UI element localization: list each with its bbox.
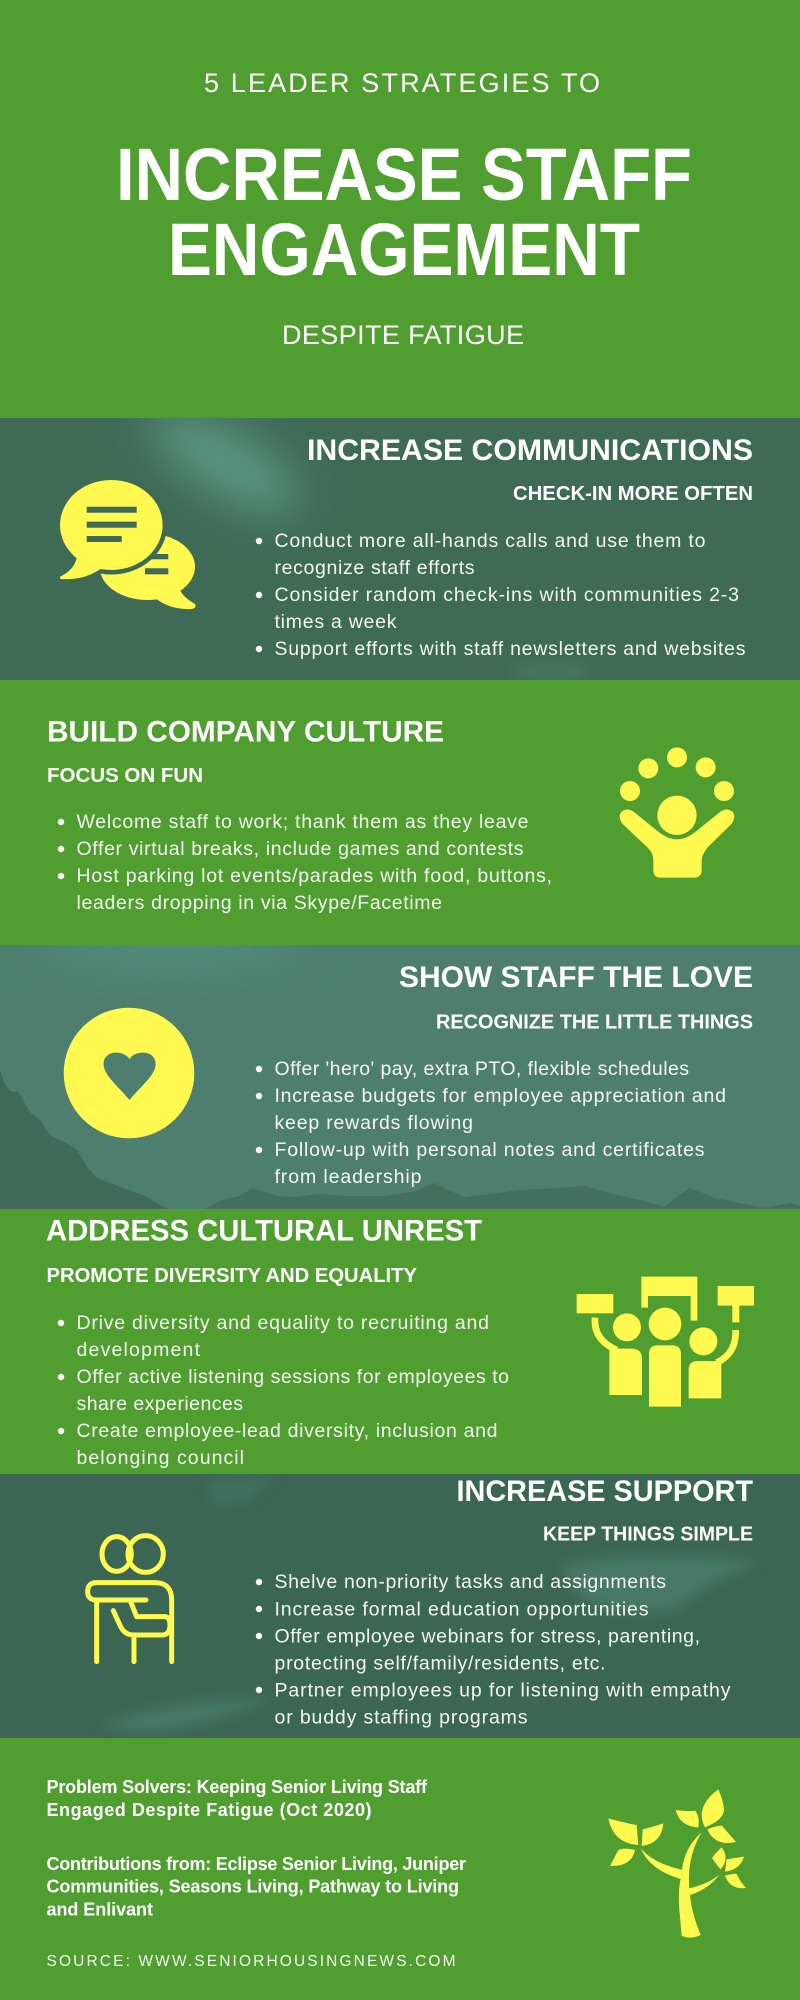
bullet list: development	[76, 1339, 201, 1361]
panel: footer credits	[0, 1738, 800, 2000]
subheading: FOCUS ON FUN	[47, 765, 203, 787]
main title: INCREASE STAFF	[116, 133, 692, 216]
bullet list: Create employee-lead diversity, inclusion and	[76, 1420, 498, 1442]
heading: INCREASE SUPPORT	[456, 1475, 753, 1508]
bullet list: Partner employees up for listening with empathy	[274, 1680, 731, 1702]
bullet list: Shelve non-priority tasks and assignments	[274, 1571, 666, 1593]
webinar reference text	[46, 1777, 428, 1820]
contributions text	[46, 1854, 466, 1920]
bullet list: times a week	[274, 611, 397, 633]
icon: tree with leaves	[608, 1789, 746, 1938]
bullet list: Support efforts with staff newsletters and websites	[274, 638, 746, 660]
bullet list: share experiences	[76, 1393, 243, 1415]
icon: people holding signs	[577, 1277, 754, 1407]
bullet list: leaders dropping in via Skype/Facetime	[76, 892, 442, 914]
bullet list: belonging council	[76, 1447, 244, 1469]
subheading: RECOGNIZE THE LITTLE THINGS	[436, 1012, 753, 1034]
subtitle: despite fatigue: DESPITE FATIGUE	[282, 320, 524, 350]
bullet list: Follow-up with personal notes and certificates	[274, 1139, 705, 1161]
webinar reference text: Engaged Despite Fatigue (Oct 2020)	[46, 1800, 372, 1820]
bullet list: protecting self/family/residents, etc.	[274, 1652, 606, 1674]
heading: BUILD COMPANY CULTURE	[47, 716, 444, 748]
panel background texture	[0, 418, 800, 680]
contributions text: and Enlivant	[46, 1900, 153, 1920]
main title: ENGAGEMENT	[168, 208, 640, 291]
bullet list: Offer employee webinars for stress, parenting,	[274, 1625, 700, 1647]
panel: address cultural unrest	[0, 1209, 800, 1474]
bullet list: Offer virtual breaks, include games and contests	[76, 838, 524, 860]
bullet list: recognize staff efforts	[274, 557, 475, 579]
bullet list: Offer 'hero' pay, extra PTO, flexible schedules	[274, 1058, 689, 1080]
bullet list	[58, 1312, 509, 1469]
panel: increase communications	[0, 418, 800, 680]
bullet list: Increase budgets for employee appreciation and	[274, 1085, 726, 1107]
subheading: KEEP THINGS SIMPLE	[543, 1524, 753, 1546]
bullet list: Consider random check-ins with communities 2-3	[274, 584, 739, 606]
bullet list: Increase formal education opportunities	[274, 1598, 649, 1620]
webinar reference text: Problem Solvers: Keeping Senior Living Staff	[46, 1777, 428, 1797]
panel: build company culture	[0, 680, 800, 945]
contributions text: Communities, Seasons Living, Pathway to Living	[46, 1877, 459, 1897]
bullet list: Conduct more all-hands calls and use them to	[274, 530, 706, 552]
panel: show staff the love	[0, 930, 800, 1209]
icon: heart in circle	[64, 1008, 194, 1138]
bullet list: Host parking lot events/parades with food, buttons,	[76, 865, 552, 887]
bullet list: Welcome staff to work; thank them as they leave	[76, 811, 528, 833]
kicker: 5 leader strategies to: 5 LEADER STRATEGIES TO	[204, 68, 600, 98]
bullet list: or buddy staffing programs	[274, 1706, 528, 1728]
panel: increase support	[0, 1474, 800, 1738]
bullet list	[256, 1058, 726, 1188]
source line: SOURCE: WWW.SENIORHOUSINGNEWS.COM	[46, 1953, 456, 1970]
contributions text: Contributions from: Eclipse Senior Living, Juniper	[46, 1854, 466, 1874]
panel background: mountains	[0, 930, 800, 1209]
bullet list: keep rewards flowing	[274, 1112, 473, 1134]
panel background texture	[0, 1474, 800, 1738]
subheading: CHECK-IN MORE OFTEN	[513, 483, 753, 505]
subheading: PROMOTE DIVERSITY AND EQUALITY	[46, 1265, 418, 1287]
icon: chat bubbles	[60, 480, 196, 609]
bullet list	[256, 530, 746, 660]
bullet list: Drive diversity and equality to recruiting and	[76, 1312, 489, 1334]
icon: two people hugging	[88, 1536, 172, 1662]
bullet list: Offer active listening sessions for employees to	[76, 1366, 509, 1388]
heading: ADDRESS CULTURAL UNREST	[46, 1214, 482, 1248]
bullet list: from leadership	[274, 1166, 422, 1188]
panel: title header	[0, 0, 800, 418]
heading: SHOW STAFF THE LOVE	[399, 961, 753, 994]
icon: person juggling	[620, 747, 734, 878]
main title	[116, 133, 692, 291]
heading: INCREASE COMMUNICATIONS	[307, 434, 753, 467]
bullet list	[256, 1571, 731, 1728]
bullet list	[58, 811, 552, 914]
